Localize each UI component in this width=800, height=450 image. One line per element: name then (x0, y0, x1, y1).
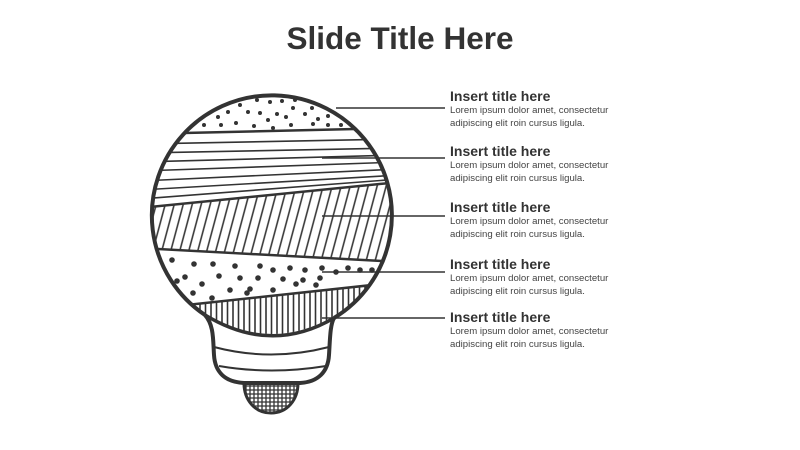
item 4: Lorem ipsum dolor amet, consectetur adipiscing elit roin cursus ligula. (450, 273, 608, 297)
item 5 (450, 309, 608, 350)
item 1 (450, 88, 608, 129)
leader lines (322, 108, 445, 318)
bulb illustration (150, 93, 445, 414)
item 5: Lorem ipsum dolor amet, consectetur adipiscing elit roin cursus ligula. (450, 326, 608, 350)
item 2 (450, 143, 608, 184)
item 2: Lorem ipsum dolor amet, consectetur adipiscing elit roin cursus ligula. (450, 160, 608, 184)
item 1: Insert title here (450, 88, 550, 104)
base (246, 385, 296, 412)
item 3: Lorem ipsum dolor amet, consectetur adipiscing elit roin cursus ligula. (450, 216, 608, 240)
bulb outline (152, 95, 392, 383)
band 2 horizontal lines (155, 138, 385, 199)
band 5 vertical lines (199, 287, 366, 334)
band 4 dots (169, 257, 375, 301)
band 3 diagonal hatch (154, 184, 390, 260)
band 1 dots (202, 98, 343, 130)
item 3 (450, 199, 608, 240)
item 2: Insert title here (450, 143, 550, 159)
item 1: Lorem ipsum dolor amet, consectetur adipiscing elit roin cursus ligula. (450, 105, 608, 129)
title: Slide Title Here (286, 20, 514, 56)
item 4 (450, 256, 608, 297)
item 4: Insert title here (450, 256, 550, 272)
item 5: Insert title here (450, 309, 550, 325)
item 3: Insert title here (450, 199, 550, 215)
neck bands (214, 347, 329, 370)
